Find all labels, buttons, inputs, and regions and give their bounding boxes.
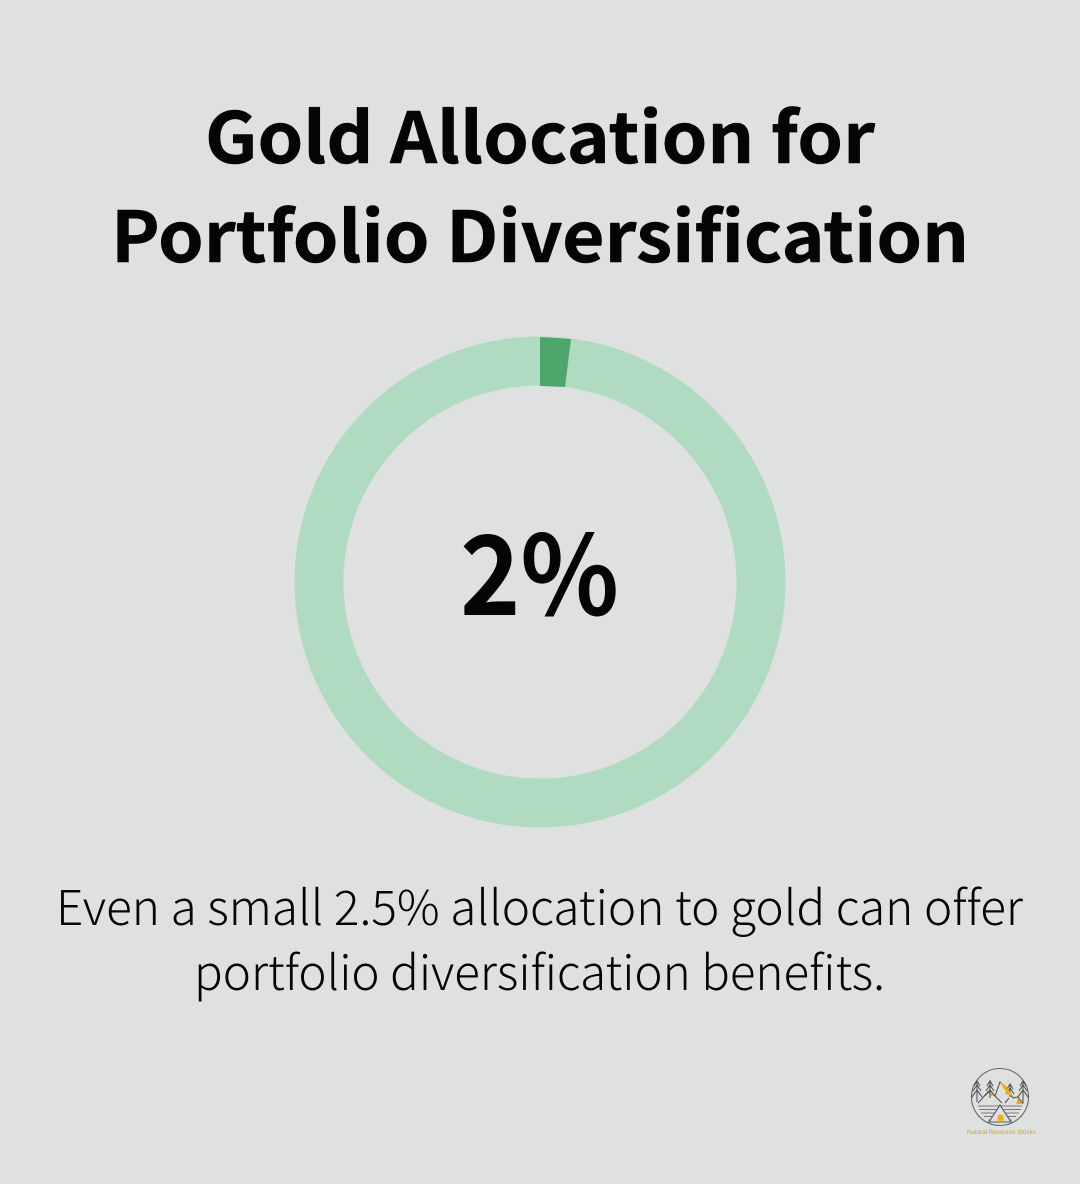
title (111, 83, 969, 283)
donut chart: 2% (319, 337, 761, 803)
donut center value: 2% (460, 487, 619, 647)
logo water lines (978, 1106, 1022, 1120)
donut highlighted segment (540, 337, 571, 387)
description text: portfolio diversification benefits. (194, 934, 885, 1004)
logo cabin (989, 1105, 1011, 1122)
logo circle (972, 1068, 1028, 1126)
title: Portfolio Diversification (111, 182, 969, 283)
logo: Natural Resource Stocks (967, 1068, 1037, 1136)
description text (56, 869, 1024, 1004)
logo mountains (978, 1082, 1023, 1104)
title: Gold Allocation for (205, 83, 876, 184)
description text: Even a small 2.5% allocation to gold can offer (56, 869, 1024, 939)
logo caption: Natural Resource Stocks (967, 1129, 1037, 1136)
logo trees (972, 1080, 1028, 1103)
donut track (319, 361, 761, 803)
